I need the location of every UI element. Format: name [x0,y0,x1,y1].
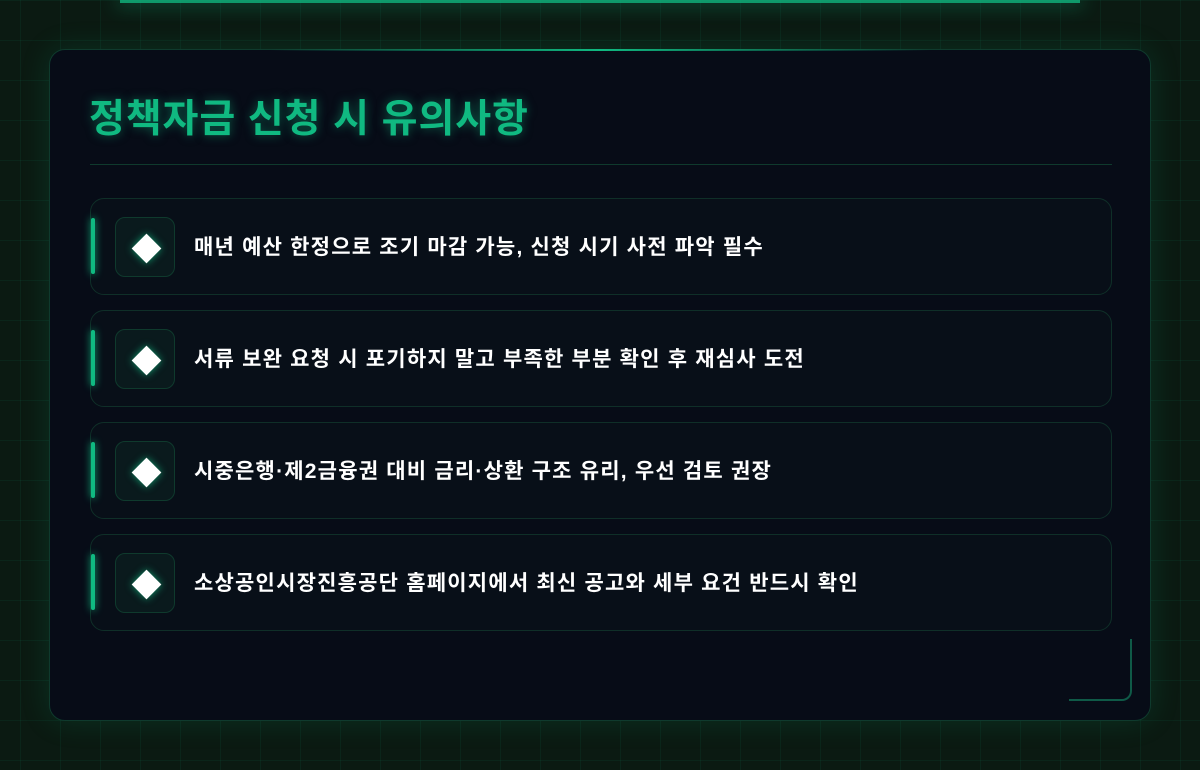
icon: diamond [115,329,175,389]
corner bracket [1069,639,1132,701]
item 3 [90,422,1112,519]
item 4 [90,534,1112,631]
title: 정책자금 신청 시 유의사항 [89,98,529,141]
text 4: 소상공인시장진흥공단 홈페이지에서 최신 공고와 세부 요건 반드시 확인 [194,572,859,595]
icon: diamond [115,553,175,613]
text 2: 서류 보완 요청 시 포기하지 말고 부족한 부분 확인 후 재심사 도전 [194,348,805,371]
item 1 [90,198,1112,295]
icon: diamond [115,217,175,277]
text 3: 시중은행·제2금융권 대비 금리·상환 구조 유리, 우선 검토 권장 [194,460,772,483]
icon: diamond [115,441,175,501]
text 1: 매년 예산 한정으로 조기 마감 가능, 신청 시기 사전 파악 필수 [194,236,764,259]
item 2 [90,310,1112,407]
